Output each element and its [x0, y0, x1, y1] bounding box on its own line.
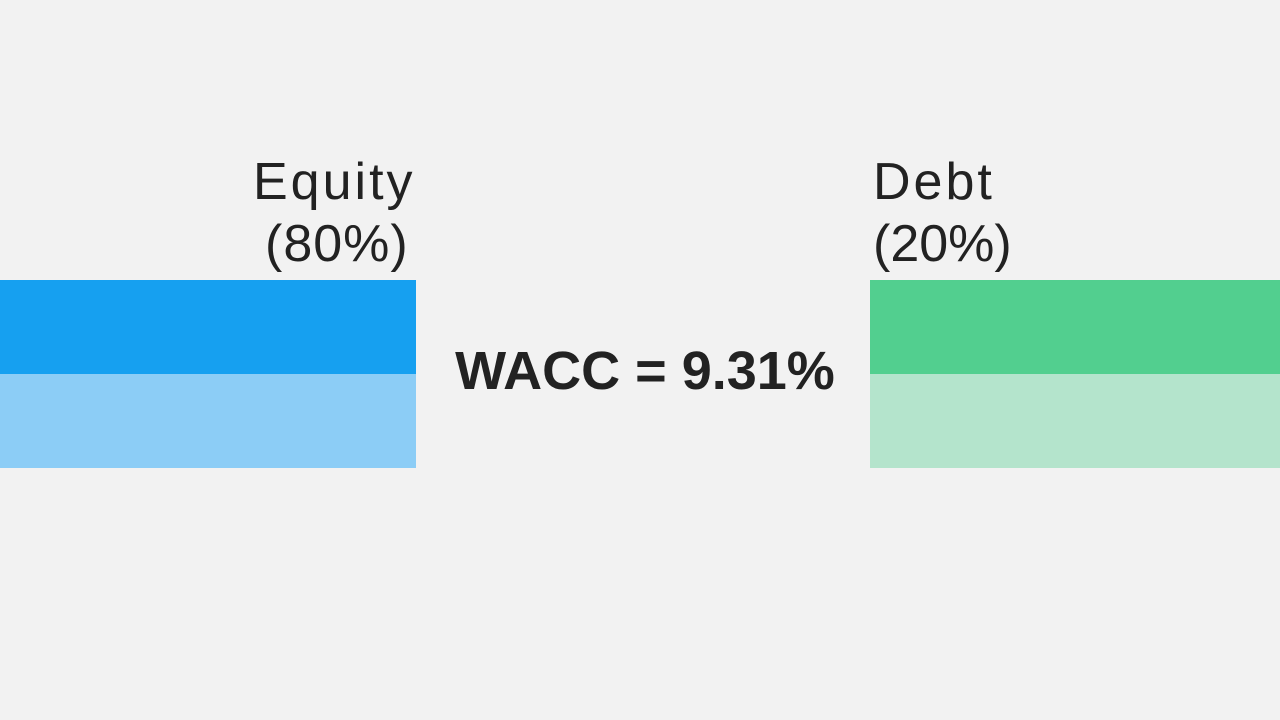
- equity label: [253, 153, 416, 273]
- debt label: (20%): [873, 215, 1012, 273]
- equity label: (80%): [265, 215, 409, 273]
- title: WACC: WACC = 9.31%: [455, 341, 835, 401]
- panel: debt: [870, 153, 1280, 468]
- panel: equity: [0, 153, 416, 468]
- debt label: Debt: [873, 153, 995, 211]
- debt bar: [870, 280, 1280, 468]
- equity bar: [0, 280, 416, 468]
- debt label: [873, 153, 1012, 273]
- equity label: Equity: [253, 153, 416, 211]
